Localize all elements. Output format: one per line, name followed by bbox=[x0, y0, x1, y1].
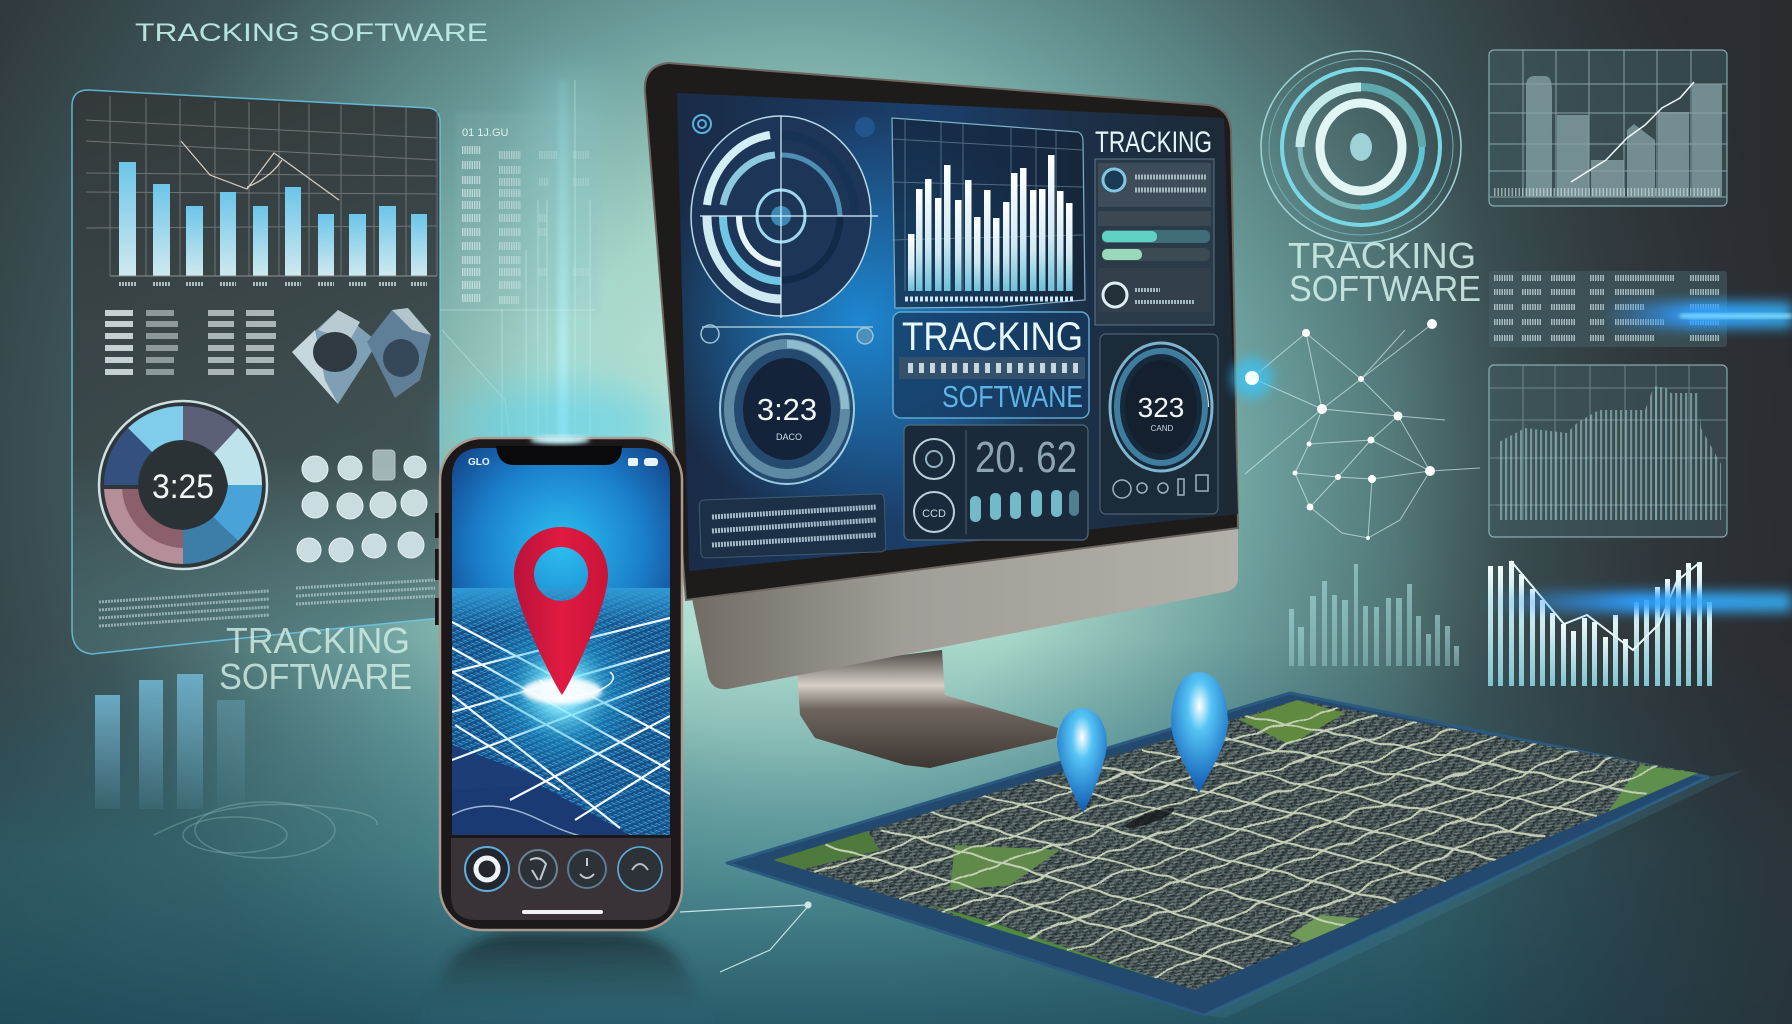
small text strips bbox=[99, 580, 435, 626]
chart: right top line chart bbox=[1489, 50, 1727, 206]
icon: pin, small blue bbox=[1057, 708, 1107, 813]
phone top glow bbox=[530, 436, 590, 444]
phone notch bbox=[496, 446, 622, 465]
phone screen bbox=[450, 448, 670, 840]
table: right data table bbox=[1489, 271, 1727, 347]
heading: left tracking software: SOFTWARE bbox=[219, 656, 412, 697]
icon: pin, large blue bbox=[1171, 672, 1228, 793]
icon: screen corner bbox=[693, 115, 711, 133]
status bar bbox=[468, 457, 658, 468]
panel: monitor numbers: 20. 62 bbox=[975, 433, 1077, 482]
light beams above phone bbox=[440, 70, 670, 465]
panel: monitor list bbox=[1095, 159, 1214, 325]
bar chart: monitor bbox=[892, 118, 1085, 308]
network graph bbox=[1245, 319, 1480, 540]
panel: monitor right gauge bbox=[1100, 334, 1218, 514]
heading: left tracking software bbox=[219, 620, 412, 697]
donut chart: 3:25 bbox=[152, 468, 214, 506]
icon: gem shapes bbox=[292, 308, 431, 404]
panel: monitor center title bbox=[893, 312, 1089, 418]
bar chart: right lower main bbox=[1488, 561, 1712, 686]
gauge: left: DACO bbox=[776, 432, 802, 442]
map bbox=[727, 672, 1745, 1018]
icon: red location pin bbox=[514, 527, 608, 695]
heading: left tracking software: TRACKING bbox=[226, 620, 410, 661]
phone body bbox=[440, 438, 682, 930]
chart: right dense bars bbox=[1489, 365, 1727, 537]
radar dial bbox=[691, 116, 878, 318]
panel: faint data table bbox=[455, 112, 600, 312]
status bar: GLO bbox=[468, 457, 490, 468]
panel: left dashboard bbox=[72, 90, 440, 654]
phone reflection bbox=[420, 932, 715, 1024]
icon grid: status dots bbox=[297, 450, 427, 562]
phone bbox=[435, 436, 682, 930]
monitor bezel bbox=[645, 63, 1238, 600]
floor light lines bbox=[680, 902, 811, 972]
monitor chin bbox=[684, 500, 1238, 689]
gauge: left: 3:23 bbox=[757, 392, 817, 427]
map terrain bbox=[760, 690, 1710, 1000]
monitor stand bbox=[797, 650, 1058, 768]
heading: top left tracking software: TRACKING SOFTWARE bbox=[135, 19, 488, 47]
gauge connector row bbox=[701, 325, 873, 344]
phone dock bbox=[451, 838, 671, 920]
heading: monitor top right tracking: TRACKING bbox=[1095, 126, 1212, 159]
monitor screen bbox=[670, 90, 1245, 580]
sketch: faint floor shapes bbox=[154, 802, 377, 858]
phone side buttons bbox=[435, 513, 441, 625]
panel: faint data table: 01 1J.GU bbox=[462, 127, 509, 139]
mini table: right bbox=[208, 313, 276, 372]
map base rim bbox=[727, 693, 1708, 1015]
panel: monitor center title: TRACKING bbox=[902, 315, 1083, 359]
panel: monitor right gauge: 323 bbox=[1138, 392, 1184, 423]
panel: monitor center title: SOFTWANE bbox=[942, 379, 1083, 414]
bar chart: faded lower left bbox=[95, 674, 245, 809]
panel: monitor numbers: CCD bbox=[922, 508, 946, 520]
mini table: left bbox=[105, 313, 178, 372]
panel: monitor numbers bbox=[904, 425, 1088, 540]
heading: right tracking software: SOFTWARE bbox=[1289, 268, 1481, 309]
donut chart bbox=[99, 401, 267, 569]
gauge: left bbox=[720, 334, 854, 484]
bar chart: right lower small bbox=[1289, 564, 1459, 666]
light streak: upper right bbox=[1600, 302, 1792, 328]
heading: right tracking software bbox=[1288, 235, 1481, 309]
light streak: lower right bbox=[1480, 592, 1792, 612]
bar chart: left panel bbox=[110, 141, 437, 284]
panel: target graphic bbox=[1261, 51, 1461, 243]
heading: right tracking software: TRACKING bbox=[1288, 235, 1476, 276]
monitor bbox=[645, 63, 1245, 768]
panel: monitor right gauge: CAND bbox=[1151, 424, 1174, 433]
light flare: monitor edge bbox=[1232, 358, 1272, 398]
panel: monitor bottom left text bbox=[699, 494, 886, 558]
